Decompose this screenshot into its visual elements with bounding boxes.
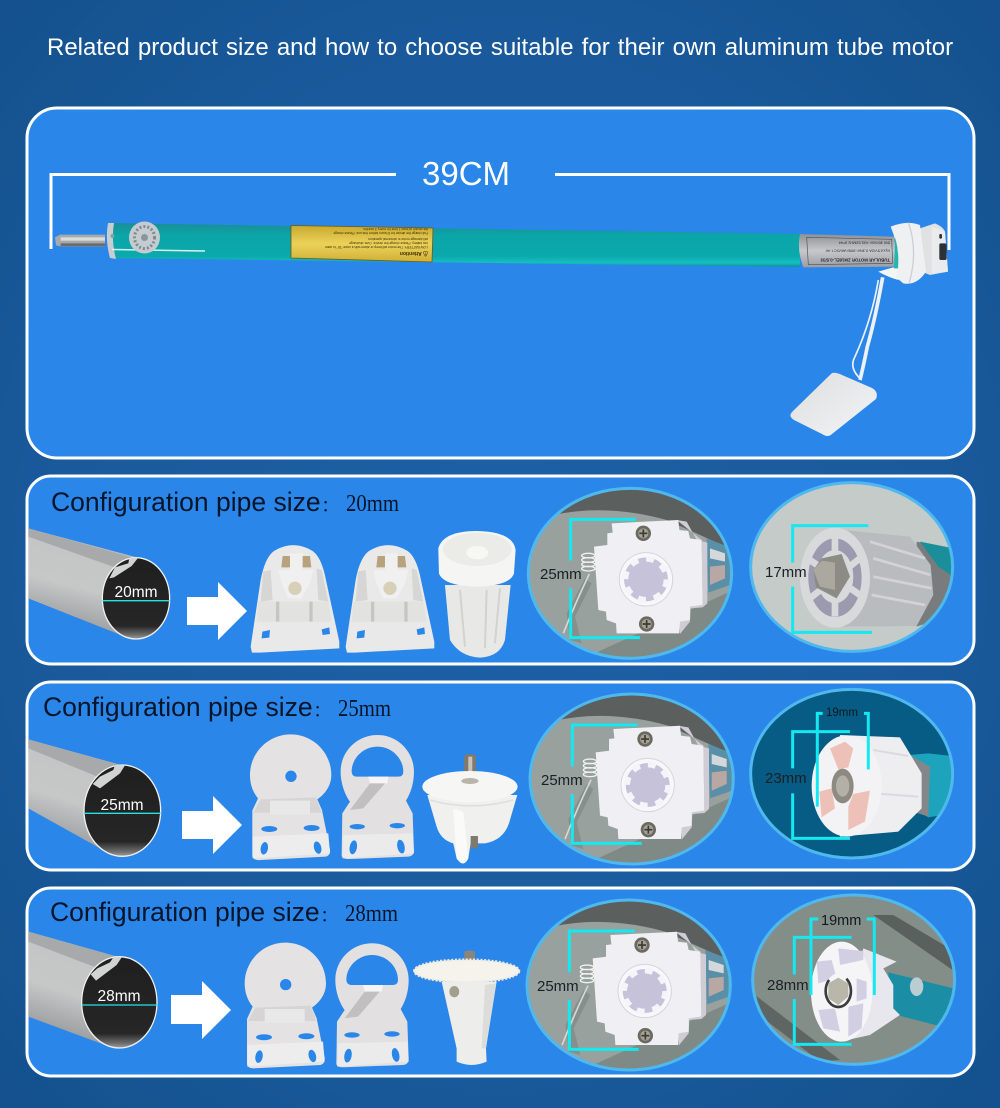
brackets 28mm: [245, 943, 409, 1068]
motor head with rating plate: [799, 223, 948, 284]
title: Related product size and how to choose suitable for their own aluminum tube motor: [47, 34, 953, 61]
drive adapter 25mm: [422, 754, 518, 863]
panel: motor length: [27, 108, 974, 458]
seal medallion: [129, 222, 160, 254]
pipe label 20mm: 20mm: [114, 584, 158, 601]
photo: crown adapter 25mm: [528, 692, 735, 866]
photo: drive head 17mm: [751, 483, 953, 651]
panel: 20mm pipe: [27, 476, 974, 664]
measure lines: [572, 725, 642, 843]
arrow: [171, 981, 231, 1039]
length label: 39CM: [422, 155, 510, 192]
measure label 23mm: 23mm: [765, 770, 807, 787]
remote strap: [853, 277, 883, 380]
gear drive adapter 28mm: [414, 950, 519, 1065]
measure lines: [569, 931, 639, 1049]
arrow: [187, 582, 247, 640]
measure label 19mm: 19mm: [826, 707, 858, 719]
photo: drive head 28mm: [753, 895, 955, 1064]
motor tube body: [108, 223, 800, 267]
attention label: will damage motor in abnormal operation.: [367, 237, 428, 241]
measure label: 17mm: [765, 564, 807, 581]
pipe label 28mm: 28mm: [97, 988, 141, 1005]
heading: 20mm: Configuration pipe size：: [51, 487, 338, 517]
panel: 25mm pipe: [27, 682, 974, 870]
heading size value: 20mm: [346, 491, 399, 517]
photo: drive head 23mm: [751, 689, 953, 858]
motor head with rating plate: TUBULAR MOTOR ZM16EL-0.5/33: [820, 257, 890, 262]
attention label: low battery. Please charge the device. Over-discharge: [349, 241, 428, 245]
attention label: [291, 226, 433, 262]
measure label: 25mm: [540, 566, 582, 583]
plug cap 20mm: [438, 531, 516, 658]
panel: 28mm pipe: [27, 888, 974, 1076]
heading size value: 25mm: [338, 696, 391, 722]
motor head with rating plate: Input:5V/2A 0.3Nm 800mAh/DC7.4V: [825, 248, 890, 253]
brackets 20mm: [251, 545, 434, 653]
heading size value: 28mm: [345, 901, 398, 927]
pipe 25mm: [28, 739, 161, 856]
remote battery pack: [790, 373, 877, 436]
measure label: 25mm: [537, 978, 579, 995]
pipe 20mm: [28, 528, 170, 639]
photo: crown adapter 25mm: [525, 898, 732, 1072]
measure label 19mm: 19mm: [821, 913, 861, 929]
measure label: 25mm: [541, 772, 583, 789]
attention label: LOW BATTERY: The motor will beep or alarm with a voice "DI" to warn: [325, 245, 428, 249]
icon: tubular motor: [55, 222, 948, 436]
attention label: the device at least 1 time for every 3 months.: [362, 227, 428, 231]
measure label 28mm: 28mm: [767, 977, 809, 994]
attention label: Full charge the device for 8 hours before first use. Please charge: [333, 231, 428, 235]
motor head with rating plate: 5W 30r/min 433.92MHz IP44: [838, 241, 890, 246]
motor shaft: [55, 235, 105, 247]
pipe 28mm: [28, 932, 157, 1048]
arrow: [182, 796, 242, 854]
heading: 28mm: Configuration pipe size：: [50, 897, 337, 927]
length measure bracket: [51, 174, 949, 250]
attention label: ⚠ Attention: [400, 250, 428, 256]
measure lines: [793, 713, 868, 838]
measure lines: [571, 519, 640, 638]
measure lines: [794, 919, 874, 1044]
photo: crown adapter 25mm: [527, 487, 733, 660]
pipe label 25mm: 25mm: [100, 797, 144, 814]
brackets 25mm: [250, 734, 414, 860]
heading: 25mm: Configuration pipe size：: [43, 692, 330, 722]
measure lines: [793, 526, 872, 632]
